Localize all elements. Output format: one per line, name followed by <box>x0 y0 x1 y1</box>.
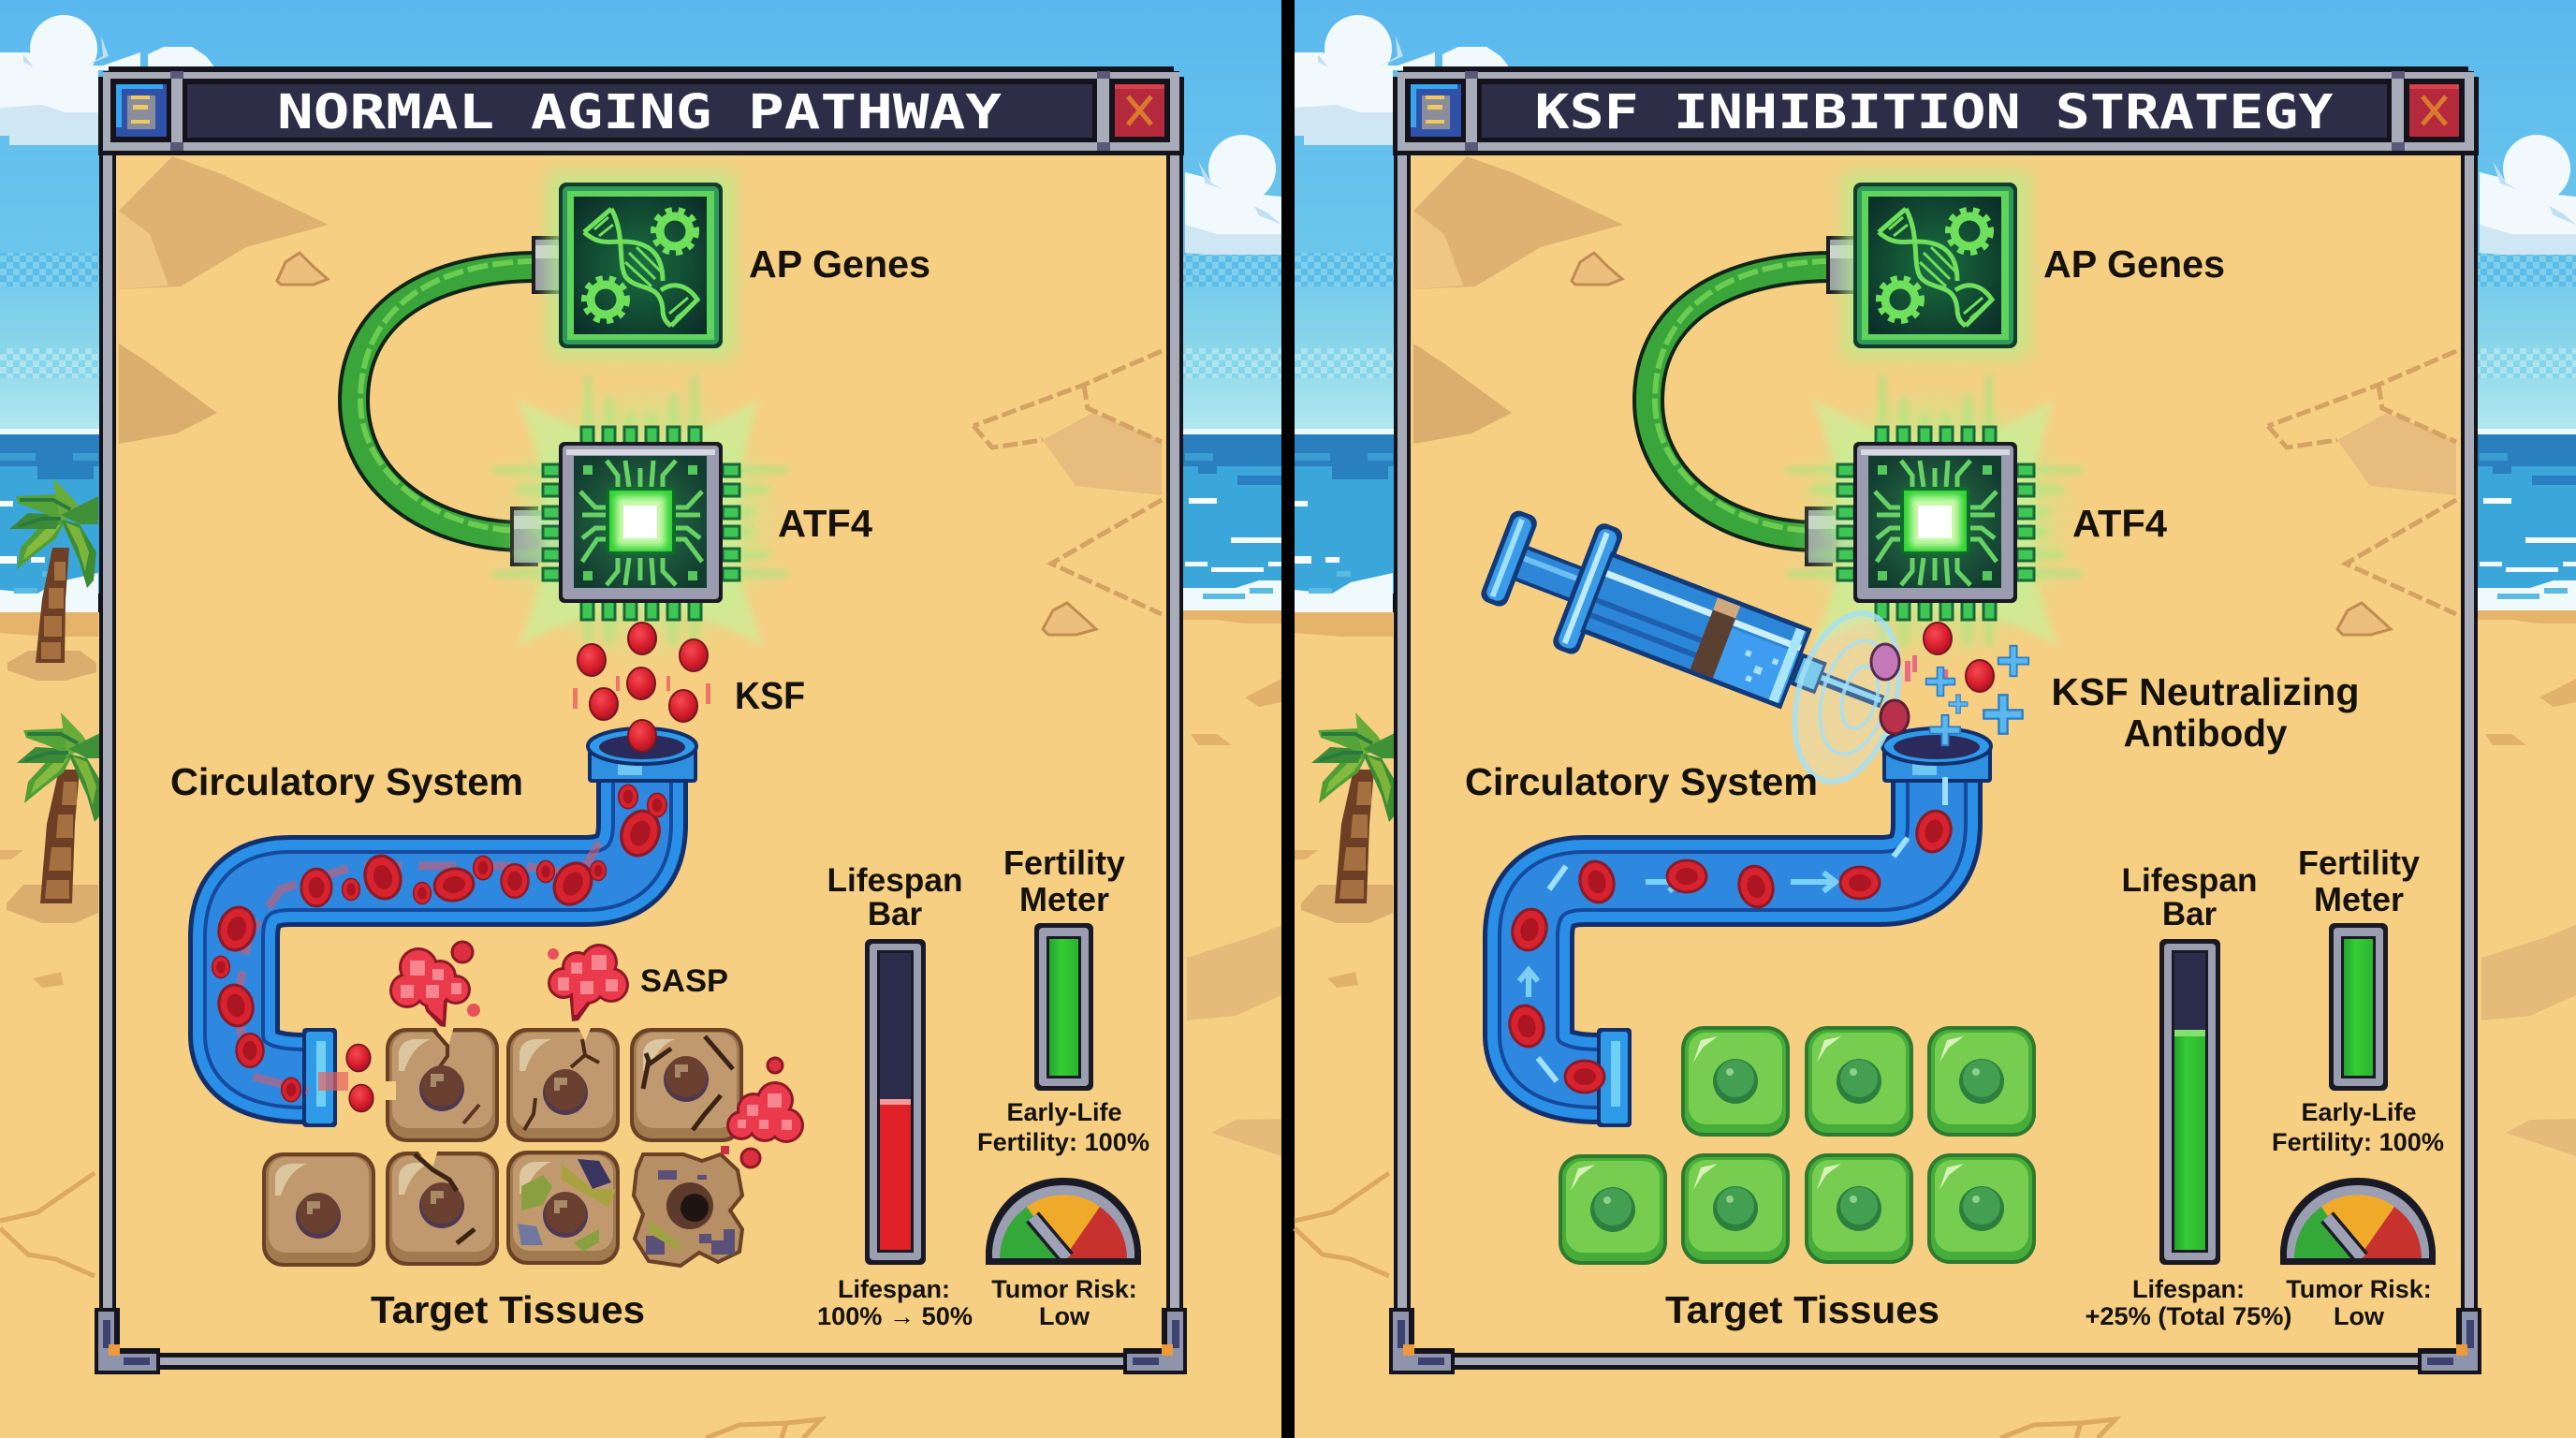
label: circulatory system: Circulatory System <box>1465 760 1818 803</box>
barrel <box>1580 551 1812 710</box>
KSF particles and antibodies <box>1871 623 2028 745</box>
label: fertility value: Early-Life <box>2301 1098 2417 1126</box>
window close button <box>2409 84 2459 137</box>
circulatory pipe with cells <box>212 728 697 1127</box>
nozzle <box>1791 653 1827 694</box>
circulatory pipe with cells <box>1505 728 1992 1127</box>
sand dunes in panel <box>1413 156 2456 635</box>
antibody swirl <box>1778 602 1916 793</box>
label: lifespan bar: Lifespan <box>2121 862 2258 899</box>
label: lifespan value: 100% → 50% <box>817 1302 973 1330</box>
title: KSF INHIBITION STRATEGY <box>1535 85 2334 140</box>
label: fertility meter: Fertility <box>2298 844 2420 882</box>
label: tumor risk value: Low <box>2334 1302 2385 1330</box>
label: fertility meter: Fertility <box>1003 844 1125 882</box>
label: tumor risk value: Tumor Risk: <box>991 1275 1137 1303</box>
tumor risk gauge <box>986 1178 1141 1265</box>
fertility meter <box>1034 923 1093 1091</box>
icon: ATF4 chip <box>491 374 788 646</box>
healthy target tissue cells <box>1559 1026 2036 1265</box>
window menu button <box>116 84 167 137</box>
fertility meter <box>2329 923 2388 1091</box>
window frame <box>95 66 1187 1374</box>
palm tree upper <box>7 478 98 681</box>
label: ATF4: ATF4 <box>778 502 872 545</box>
icon: ATF4 chip <box>1786 374 2083 646</box>
SASP cloud 3 <box>721 1058 804 1167</box>
palm tree lower <box>1301 712 1400 923</box>
label: tumor risk value: Low <box>1039 1302 1090 1330</box>
cell row 1 column 1 <box>384 1026 499 1142</box>
label: target tissues: Target Tissues <box>371 1288 645 1331</box>
KSF particles <box>346 623 710 1111</box>
label: ATF4: ATF4 <box>2072 502 2167 545</box>
icon: AP genes <box>1842 171 2029 359</box>
SASP cloud 1 <box>389 942 480 1027</box>
label: lifespan bar: Bar <box>2162 896 2217 932</box>
beach background <box>0 0 1288 1438</box>
label: fertility value: Fertility: 100% <box>2272 1128 2444 1156</box>
plunger <box>1478 508 1540 609</box>
label: AP genes: AP Genes <box>749 242 930 286</box>
label: SASP: SASP <box>640 963 728 999</box>
label: circulatory system: Circulatory System <box>170 760 523 803</box>
panel body <box>1405 152 2466 1359</box>
left half: normal aging pathway <box>0 0 1288 1438</box>
feedback cable <box>1648 236 1854 566</box>
cell row 1 column 2 <box>506 1026 620 1142</box>
cell row 2 column 1 <box>262 1152 375 1267</box>
label: lifespan bar: Bar <box>868 896 923 932</box>
center divider <box>1281 0 1295 1438</box>
syringe <box>1471 491 1907 765</box>
panel body <box>110 152 1172 1359</box>
tumor risk gauge <box>2280 1178 2436 1265</box>
palm tree lower <box>7 712 106 923</box>
SASP cloud 2 <box>548 944 629 1021</box>
cell row 2 column 3 <box>506 1151 620 1265</box>
label: KSF neutralizing antibody: Antibody <box>2123 712 2288 755</box>
label: lifespan value: +25% (Total 75%) <box>2086 1302 2291 1330</box>
label: tumor risk value: Tumor Risk: <box>2286 1275 2432 1303</box>
label: KSF neutralizing antibody: KSF Neutralizing <box>2052 670 2359 713</box>
SASP clouds <box>389 942 804 1167</box>
lifespan bar <box>2159 939 2220 1265</box>
label: lifespan value: Lifespan: <box>838 1275 950 1303</box>
label: fertility meter: Meter <box>2314 880 2404 918</box>
label: fertility meter: Meter <box>1019 880 1109 918</box>
label: lifespan bar: Lifespan <box>827 862 962 899</box>
right half: KSF inhibition strategy <box>1295 0 2576 1438</box>
beach background <box>1295 0 2576 1438</box>
needle <box>1819 672 1884 708</box>
label: target tissues: Target Tissues <box>1665 1288 1939 1331</box>
title: NORMAL AGING PATHWAY <box>277 85 1002 140</box>
feedback cable <box>354 236 560 566</box>
window menu button <box>1411 84 1461 137</box>
label: lifespan value: Lifespan: <box>2132 1275 2245 1303</box>
window frame <box>1389 66 2481 1374</box>
window close button <box>1115 84 1164 137</box>
lifespan bar <box>865 939 926 1265</box>
sand dunes in panel <box>119 156 1162 635</box>
label: AP genes: AP Genes <box>2043 242 2225 286</box>
icon: AP genes <box>548 171 735 359</box>
label: KSF: KSF <box>735 674 805 717</box>
flange <box>1550 521 1625 657</box>
cell row 2 column 4 <box>634 1154 742 1266</box>
cell row 1 column 3 <box>630 1028 743 1142</box>
label: fertility value: Fertility: 100% <box>977 1128 1149 1156</box>
senescent target tissue cells <box>262 1026 743 1267</box>
cell row 2 column 2 <box>386 1150 499 1266</box>
label: fertility value: Early-Life <box>1006 1098 1122 1126</box>
